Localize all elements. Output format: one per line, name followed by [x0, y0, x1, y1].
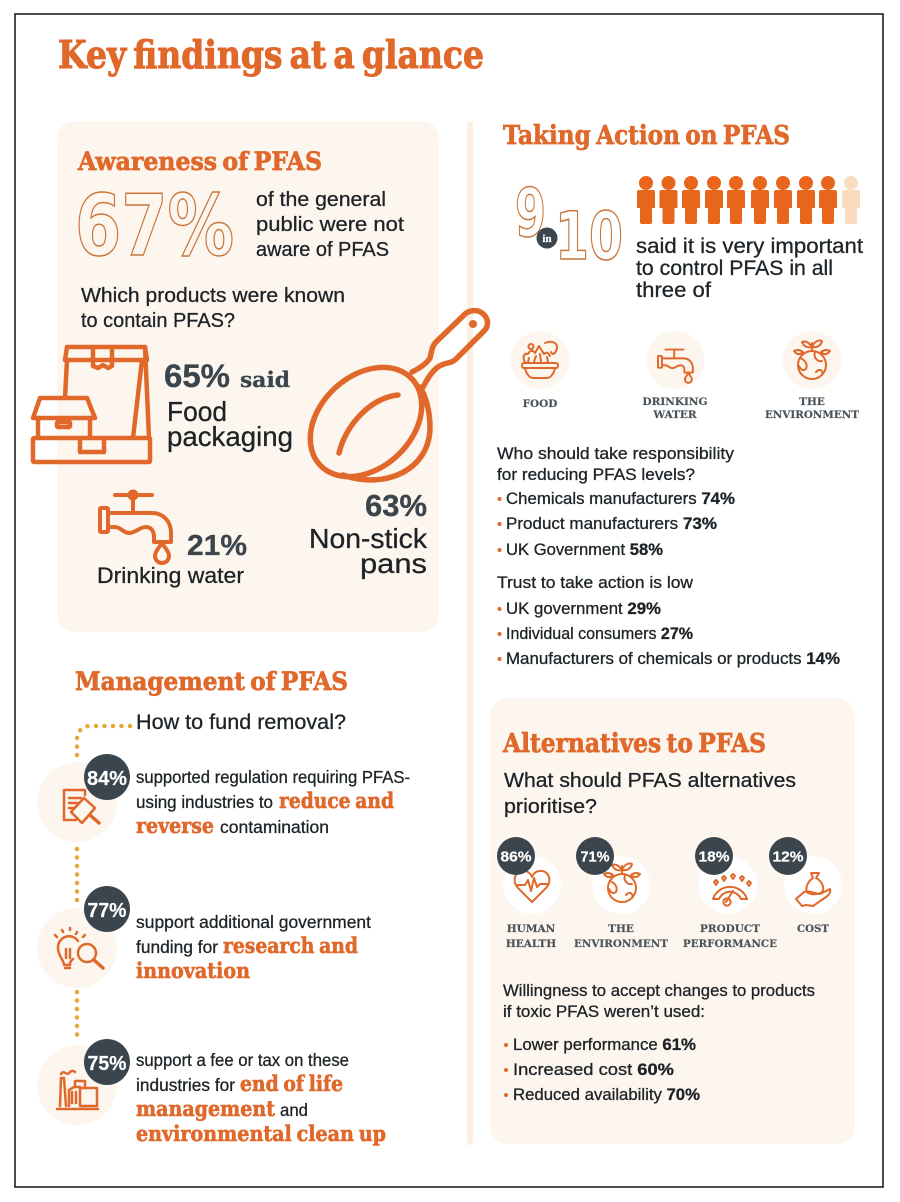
text block: willingness: if toxic PFAS weren’t used: [503, 1003, 705, 1021]
priority: product performance [683, 837, 777, 950]
label: drinking water: WATER [652, 409, 697, 421]
text block: responsibility [497, 445, 735, 559]
text: fee or tax: end of life [240, 1071, 343, 1096]
text: fee or tax: support a fee or tax on these [136, 1050, 349, 1070]
icon: food [511, 331, 569, 389]
priority: the environment: 71% [580, 848, 610, 866]
text: very important [636, 235, 863, 302]
question: known products: to contain PFAS? [81, 309, 235, 332]
priority: product performance: PERFORMANCE [683, 938, 777, 950]
badge: 84%: 84% [87, 768, 127, 790]
stat: 67% outlined: 67% [75, 177, 234, 276]
text block: responsibility: Chemicals manufacturers 74% [506, 490, 735, 508]
stat: 63% non-stick pans: 63% [365, 488, 427, 523]
pictogram: nine of ten people [637, 176, 860, 224]
text block: trust: UK government 29% [506, 600, 661, 618]
text: general public not aware: aware of PFAS [256, 238, 389, 261]
icon: drinking water [646, 331, 704, 389]
stat: 9 in 10: 10 [555, 198, 623, 275]
text block: responsibility: Who should take responsibility [497, 445, 735, 463]
badge: 77% [84, 886, 130, 932]
text block: responsibility: UK Government 58% [506, 541, 663, 559]
text: funding: funding for [136, 937, 218, 957]
text block: trust: Trust to take action is low [497, 574, 693, 592]
text block: willingness: Lower performance 61% [513, 1036, 696, 1054]
priority: product performance: PRODUCT [700, 923, 760, 935]
text: regulation [136, 767, 410, 838]
stat: 9 in 10: in [542, 233, 552, 245]
text block: willingness: Reduced availability 70% [513, 1086, 700, 1104]
label: the environment: THE [799, 396, 825, 408]
text: general public not aware [256, 188, 404, 261]
priority: cost [769, 837, 842, 935]
badge: 75%: 75% [88, 1053, 127, 1075]
priority: the environment: THE [608, 923, 634, 935]
text: very important: to control PFAS in all [636, 257, 833, 280]
dotted connector [77, 726, 130, 1040]
text: fee or tax: industries for [136, 1075, 235, 1095]
icon: document and gavel [64, 790, 99, 823]
text: regulation: using industries to [136, 792, 273, 812]
question: known products: Which products were known [81, 284, 345, 307]
text: regulation: contamination [220, 817, 329, 837]
item: funding 77% [37, 886, 371, 988]
stat: 63% non-stick pans [309, 488, 428, 579]
text block: responsibility: Product manufacturers 73% [506, 515, 717, 533]
priority: human health [497, 837, 561, 950]
label: drinking water [643, 396, 707, 421]
heading: awareness: Awareness of PFAS [77, 147, 322, 176]
priority: the environment: ENVIRONMENT [574, 938, 668, 950]
stat: 65% food packaging: packaging [167, 421, 293, 452]
text block: trust [497, 574, 840, 668]
priority: human health: HUMAN [507, 923, 556, 935]
text: regulation: reverse [136, 813, 214, 838]
question: known products [81, 284, 345, 332]
label: food: FOOD [523, 398, 557, 410]
label: the environment [765, 396, 859, 421]
question: prioritise: What should PFAS alternatives [504, 769, 796, 792]
item: fee or tax 75% [37, 1039, 386, 1146]
text: fee or tax [136, 1050, 386, 1146]
text block: willingness: Willingness to accept changes to products [503, 982, 815, 1000]
text: funding: research and [223, 933, 358, 958]
text: very important: said it is very important [636, 235, 863, 258]
stat: 65% food packaging: said [240, 367, 290, 392]
priority: cost: COST [797, 923, 829, 935]
text: fee or tax: management [136, 1096, 275, 1121]
stat: 9 in 10: 9 [515, 174, 546, 252]
heading: alternatives: Alternatives to PFAS [502, 729, 766, 759]
stat: 65% food packaging: Food [167, 396, 227, 427]
text: regulation: reduce and [279, 788, 394, 813]
icon: non-stick pan [289, 311, 488, 499]
stat: 65% food packaging: 65% [164, 358, 230, 394]
badge: 84% [84, 754, 130, 800]
text block: willingness [503, 982, 815, 1104]
icon: food packaging boxes [33, 347, 150, 462]
badge: 75% [84, 1039, 130, 1085]
icon: drinking water tap [100, 492, 171, 563]
stat: 21% drinking water: Drinking water [97, 563, 244, 588]
item: regulation 84% [37, 754, 410, 842]
stat: 63% non-stick pans: pans [360, 548, 427, 579]
priority: the environment [574, 837, 668, 950]
priority: cost: 12% [772, 848, 804, 866]
priority: product performance: 18% [698, 848, 730, 866]
stat: 65% food packaging [164, 358, 293, 452]
panel: awareness of PFAS [33, 121, 439, 632]
text block: trust: Manufacturers of chemicals or products 14% [506, 650, 840, 668]
label: the environment: ENVIRONMENT [765, 409, 859, 421]
text block: willingness: Increased cost 60% [513, 1061, 674, 1079]
badge: 77%: 77% [88, 900, 127, 922]
text: general public not aware: of the general [256, 188, 386, 211]
text block: trust: Individual consumers 27% [506, 625, 693, 643]
text: funding: innovation [136, 958, 250, 983]
stat: 63% non-stick pans: Non-stick [309, 523, 428, 554]
icon: bulb and magnifier [55, 928, 103, 968]
stat: 21% drinking water [97, 530, 247, 588]
title: Key findings at a glance [58, 32, 484, 77]
text: funding [136, 912, 371, 983]
panel: alternatives to PFAS [490, 698, 855, 1144]
text: funding: support additional government [136, 912, 371, 932]
stat: 9 in 10 [515, 174, 623, 275]
text: general public not aware: public were not [256, 213, 404, 236]
priority: human health: 86% [500, 848, 532, 866]
priority: human health: HEALTH [506, 938, 556, 950]
stat: 21% drinking water: 21% [187, 530, 247, 562]
icon: factory [57, 1071, 98, 1109]
icon: environment [783, 331, 841, 389]
text: regulation: supported regulation requiring PFAS- [136, 767, 410, 787]
text: fee or tax: and [280, 1100, 308, 1120]
heading: taking action: Taking Action on PFAS [503, 121, 790, 151]
text block: responsibility: for reducing PFAS levels? [497, 466, 695, 484]
text: very important: three of [636, 279, 711, 302]
label: drinking water: DRINKING [643, 396, 707, 408]
text: fee or tax: environmental clean up [136, 1121, 386, 1146]
question: prioritise [504, 769, 796, 818]
question: prioritise: prioritise? [504, 795, 597, 818]
question: fund removal: How to fund removal? [136, 710, 346, 734]
heading: management: Management of PFAS [75, 667, 348, 696]
